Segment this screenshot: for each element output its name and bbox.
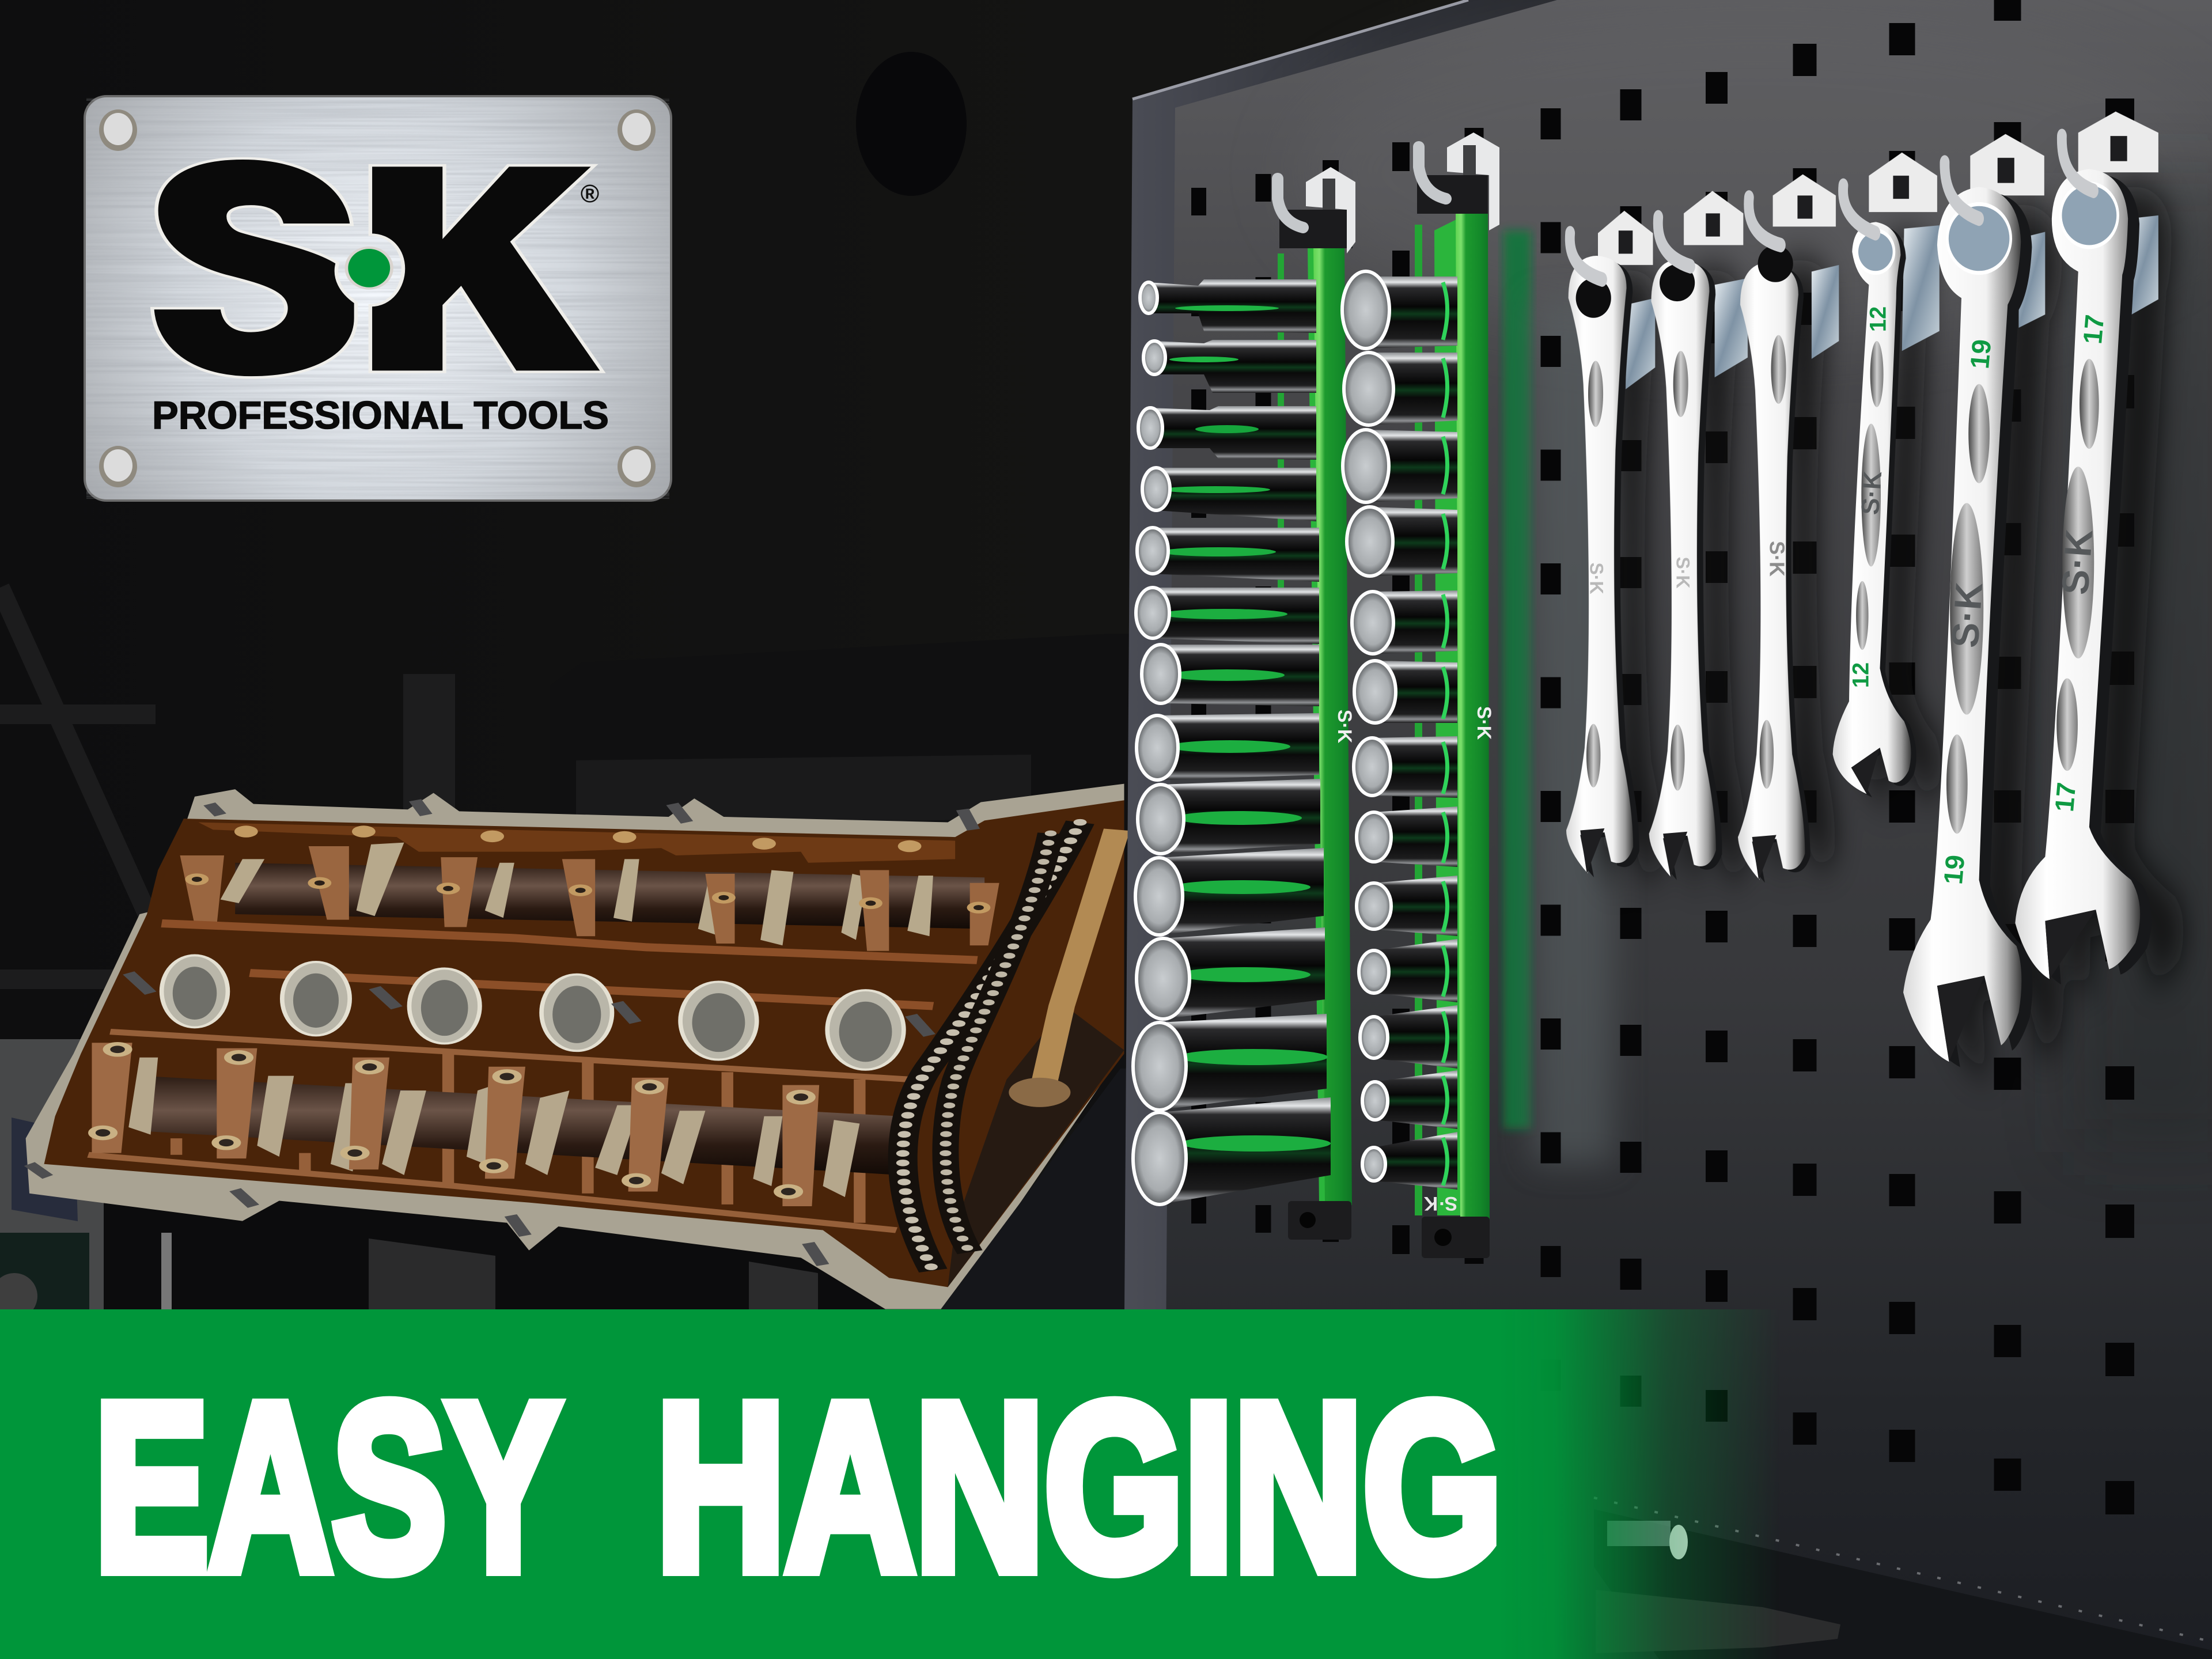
timing gear dark area xyxy=(948,1006,1124,1287)
socket 4 xyxy=(1347,507,1457,576)
tool cabinet xyxy=(550,634,1129,1123)
socket 2 xyxy=(1344,353,1457,425)
socket 10 xyxy=(1359,939,1457,1002)
socket 1 xyxy=(1342,271,1457,349)
spark plug wells xyxy=(162,955,904,1070)
plate slot xyxy=(1463,145,1476,175)
green glow xyxy=(1503,230,1531,1129)
top journals xyxy=(221,843,933,945)
hanger plates xyxy=(1598,112,2158,265)
timing chain outer xyxy=(903,823,1080,1271)
rail mark: S·K xyxy=(1334,710,1355,744)
wrench brand marks: S·K xyxy=(1944,581,1990,649)
left truss xyxy=(0,588,161,979)
socket 3 xyxy=(1343,430,1457,502)
top block xyxy=(1417,175,1488,214)
bright edge xyxy=(1132,0,1468,99)
bottom cap xyxy=(1288,1201,1351,1240)
registered mark: ® xyxy=(581,180,599,208)
wrench bodies xyxy=(1566,169,2140,1062)
logo tagline: PROFESSIONAL TOOLS xyxy=(152,393,609,437)
plate slot xyxy=(1323,179,1335,210)
panel highlight xyxy=(1296,12,2212,334)
socket 13 xyxy=(1133,1097,1331,1205)
timing chain inner xyxy=(945,834,1051,1252)
wrench brand marks: S·K xyxy=(1765,541,1789,577)
right socket rail xyxy=(1415,132,1499,1258)
logo plate xyxy=(85,96,671,501)
back edge xyxy=(1278,253,1284,611)
socket 6 xyxy=(1354,661,1457,723)
headline xyxy=(94,1354,1502,1620)
gasket flange xyxy=(26,784,1124,1309)
engine cylinder head xyxy=(26,784,1124,1309)
rivets xyxy=(99,109,656,487)
top bearing caps xyxy=(180,846,999,951)
top block xyxy=(1279,210,1353,248)
handle slots xyxy=(1586,335,2099,834)
rail mark: S·K xyxy=(1473,706,1495,740)
brushed texture xyxy=(86,98,669,499)
green dot xyxy=(346,248,392,289)
top camshaft xyxy=(235,863,984,929)
pliers on ledge xyxy=(1596,1590,1840,1653)
socket 5 xyxy=(1352,590,1457,654)
socket 12 xyxy=(1133,1014,1328,1110)
right socket set xyxy=(1342,271,1457,1190)
left socket set xyxy=(1133,279,1331,1205)
green gaps xyxy=(1308,248,1348,1204)
dark opening xyxy=(179,853,357,1094)
left socket rail xyxy=(1278,167,1355,1240)
wrench size 19 upper: 19 xyxy=(1964,338,1997,370)
socket 7 xyxy=(1354,736,1457,798)
socket 11 xyxy=(1360,1005,1457,1069)
letter S xyxy=(152,158,356,377)
round wall fixture xyxy=(856,52,967,196)
dark under engine xyxy=(104,1175,968,1313)
green-black bracket xyxy=(0,1233,89,1310)
hook xyxy=(1419,147,1446,199)
pegboard panel xyxy=(1122,0,2212,1659)
socket 4 xyxy=(1142,468,1316,521)
bottom cap xyxy=(1422,1217,1490,1258)
headline: HANGING xyxy=(656,1354,1502,1620)
socket 7 xyxy=(1142,645,1319,706)
blurred reflection xyxy=(1532,300,1613,1164)
plate slots xyxy=(1619,136,2127,253)
wrench dark edges xyxy=(1573,175,2152,1067)
letter K xyxy=(370,165,603,372)
hook xyxy=(1278,179,1303,228)
socket 8 xyxy=(1137,713,1319,780)
rail bar xyxy=(1456,214,1490,1220)
gasket lines lower xyxy=(88,1032,911,1230)
socket 10 xyxy=(1135,848,1324,935)
wrench size 17 upper: 17 xyxy=(2077,313,2109,345)
solid banner xyxy=(0,1309,1498,1659)
top lighter casting xyxy=(198,823,955,863)
grey bench xyxy=(0,1039,104,1310)
wrench brand marks: S·K xyxy=(1586,562,1607,594)
socket 3 xyxy=(1138,406,1316,460)
well bores xyxy=(173,967,892,1062)
socket 2 xyxy=(1143,340,1316,393)
cap mark: S·K xyxy=(1423,1192,1457,1214)
S·K logo mark xyxy=(152,158,603,377)
perforated face xyxy=(1164,0,2212,1659)
wrench size 12 lower: 12 xyxy=(1849,662,1874,688)
socket 9 xyxy=(1138,779,1320,854)
ring bores chrome xyxy=(1857,184,2118,273)
flange studs xyxy=(29,800,974,1265)
lower brackets xyxy=(1626,215,2158,389)
wrench size 12 upper: 12 xyxy=(1866,306,1891,332)
socket 6 xyxy=(1136,588,1319,644)
open-end jaws xyxy=(1580,748,2096,1062)
cabinet drawers xyxy=(576,876,1025,986)
top bolts xyxy=(197,832,979,908)
socket 8 xyxy=(1357,806,1457,867)
wrench brand marks: S·K xyxy=(1856,470,1887,516)
socket 13 xyxy=(1362,1132,1457,1190)
bottom camshaft xyxy=(139,1076,900,1175)
grey parts under engine xyxy=(369,1238,818,1309)
fading banner edge xyxy=(1498,1309,1780,1659)
hanger plate xyxy=(1306,167,1355,253)
socket 1 xyxy=(1140,279,1316,333)
wrench set xyxy=(1566,112,2184,1078)
right vignette xyxy=(2074,173,2212,1152)
small socket on ledge xyxy=(1607,1521,1688,1559)
upright column xyxy=(403,674,455,1066)
square holes xyxy=(1199,0,2120,1515)
back edge xyxy=(1415,225,1422,1215)
bottom journals xyxy=(128,1058,859,1197)
wrench brand marks: S·K xyxy=(1673,556,1694,589)
rail bar xyxy=(1313,248,1352,1205)
lower ledge xyxy=(1594,1509,2212,1659)
wrench size 19 lower: 19 xyxy=(1938,854,1970,885)
bottom bolts xyxy=(103,1050,801,1192)
outer flange xyxy=(1122,0,2212,1659)
background: workshop details xyxy=(0,52,1129,1123)
wrench size 17 lower: 17 xyxy=(2049,781,2081,813)
socket 11 xyxy=(1137,927,1325,1019)
wrench brand marks: S·K xyxy=(2054,528,2100,596)
wrench shadows xyxy=(1597,185,2184,1078)
headline: EASY xyxy=(94,1354,560,1620)
lower-left machinery xyxy=(0,1039,968,1319)
plate base xyxy=(85,96,671,501)
gasket rails middle xyxy=(162,923,977,1006)
hanger plate xyxy=(1447,132,1499,230)
blue label xyxy=(12,1118,78,1221)
brown block xyxy=(44,800,1124,1287)
socket 9 xyxy=(1357,876,1457,936)
ledge line xyxy=(1594,1498,2212,1642)
black panel stand xyxy=(941,1069,1135,1309)
bottom bearing caps xyxy=(92,1043,819,1206)
guide nut xyxy=(1009,1078,1070,1107)
guide rail xyxy=(1043,830,1117,1087)
socket 12 xyxy=(1362,1070,1457,1129)
wrench brand marks xyxy=(1586,470,2100,649)
socket 5 xyxy=(1137,528,1319,582)
green gaps xyxy=(1434,216,1466,1215)
green banner xyxy=(0,1309,1780,1659)
hooks xyxy=(1570,136,2093,279)
ring bores dark xyxy=(1576,245,1793,318)
